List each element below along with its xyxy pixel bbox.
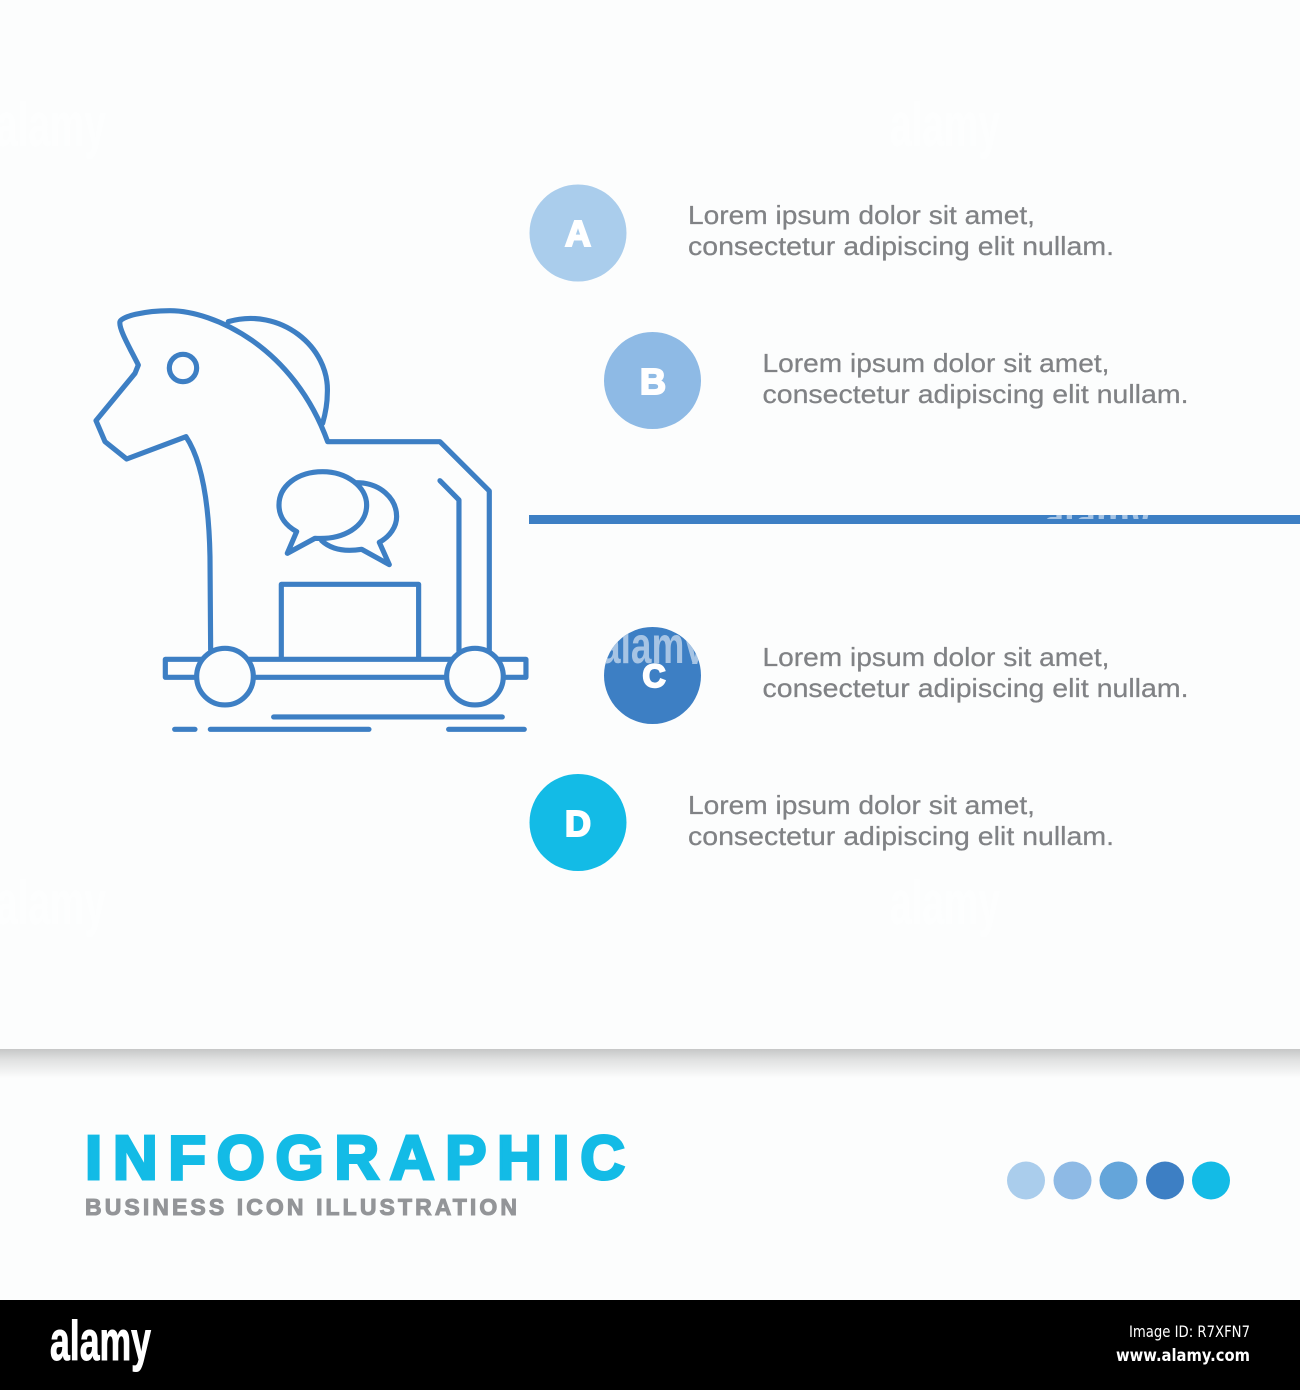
text B: Lorem ipsum dolor sit amet,	[762, 348, 1110, 378]
colour dots	[1007, 1162, 1230, 1200]
text: alamy	[0, 869, 106, 938]
item B	[604, 332, 1188, 429]
text B	[762, 348, 1188, 409]
text: alamy	[890, 91, 1000, 160]
letter A: A	[565, 213, 591, 254]
text: alamy	[890, 869, 1000, 938]
text D: consectetur adipiscing elit nullam.	[688, 821, 1114, 851]
heading: infographic: INFOGRAPHIC	[85, 1124, 625, 1193]
badge A	[530, 184, 626, 282]
image id: Image ID: R7XFN7	[1129, 1322, 1250, 1341]
website: www.alamy.com	[1116, 1346, 1250, 1366]
rear wheel	[447, 648, 503, 705]
text A: Lorem ipsum dolor sit amet,	[688, 200, 1035, 230]
icon: trojan horse on wheels	[96, 311, 526, 729]
hatch door	[281, 584, 419, 658]
letter B: B	[640, 361, 666, 402]
item C	[604, 627, 1186, 724]
horse eye	[169, 354, 197, 382]
footer shadow band	[0, 1049, 1300, 1078]
horizontal divider line: alamy	[1043, 482, 1151, 551]
item D	[530, 774, 1114, 871]
badge C	[604, 627, 701, 724]
back speech bubble	[322, 483, 397, 565]
text D: Lorem ipsum dolor sit amet,	[688, 790, 1035, 820]
front wheel	[197, 648, 253, 705]
badge D	[530, 774, 626, 871]
horse body outline	[96, 311, 489, 650]
alamy logo: alamy	[50, 1309, 151, 1372]
text C	[762, 642, 1188, 703]
text: alamy	[0, 91, 106, 160]
item A	[530, 184, 1114, 282]
horse mane	[228, 318, 327, 423]
text A: consectetur adipiscing elit nullam.	[688, 231, 1114, 261]
badge B	[604, 332, 701, 429]
front speech bubble	[279, 472, 367, 553]
ground lines	[175, 717, 524, 729]
watermark on badge C: alamy	[600, 617, 705, 675]
text C: consectetur adipiscing elit nullam.	[762, 673, 1188, 703]
text B: consectetur adipiscing elit nullam.	[762, 379, 1188, 409]
footer bar	[0, 1300, 1300, 1390]
text D	[688, 790, 1114, 851]
text A	[688, 200, 1114, 261]
subheading: BUSINESS ICON ILLUSTRATION	[85, 1194, 517, 1220]
wheeled platform	[165, 659, 526, 677]
letter D: D	[565, 803, 591, 844]
letter C: C	[642, 658, 666, 694]
horizontal divider line	[529, 515, 1300, 524]
rear inner leg	[440, 481, 459, 652]
text C: Lorem ipsum dolor sit amet,	[762, 642, 1110, 672]
